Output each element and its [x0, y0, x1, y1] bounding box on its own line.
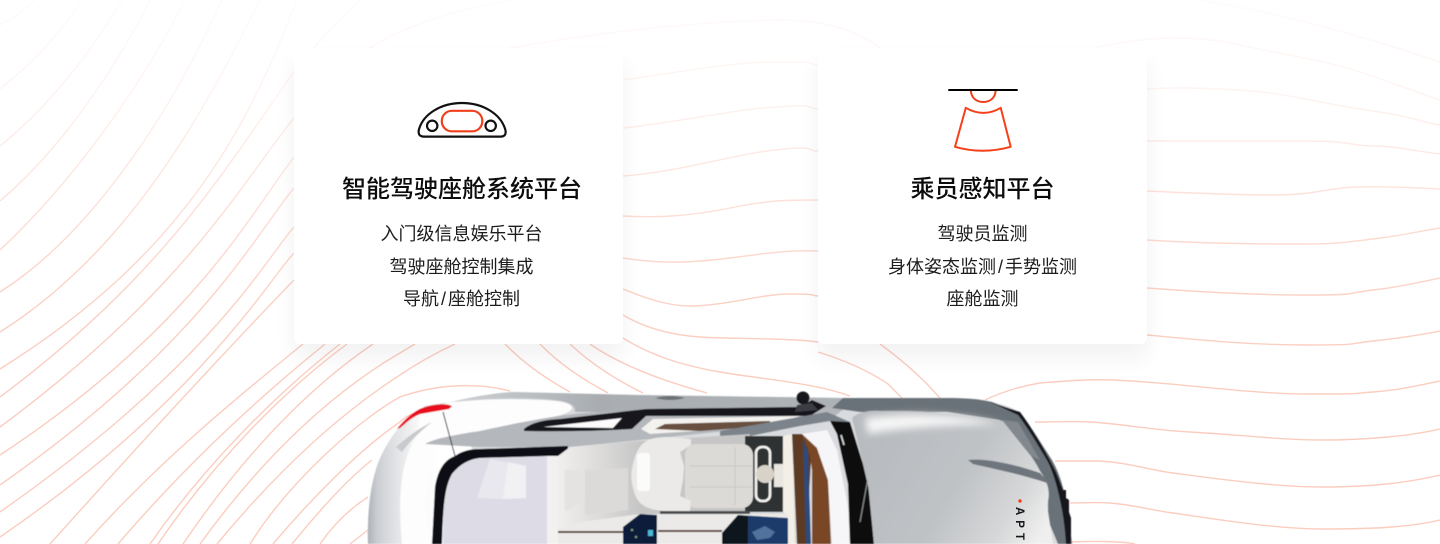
heading: 乘员感知平台: [910, 176, 1054, 203]
pillar detail: [841, 435, 844, 445]
feature list: /: [998, 256, 1003, 276]
feature list: /: [441, 289, 446, 309]
main display: [722, 515, 788, 544]
trunk interior: [443, 456, 547, 544]
icon: occupant camera: [948, 89, 1018, 152]
window slit: [524, 400, 826, 431]
black windshield pillar: [830, 421, 874, 544]
seat back: [631, 437, 691, 511]
feature list: 驾驶员监测: [938, 224, 1028, 244]
steering column: [774, 464, 795, 487]
right roof strut: [720, 412, 850, 442]
dark hood edge: [832, 398, 1072, 544]
front cushion: [685, 444, 753, 508]
wood trim strip: [641, 416, 800, 434]
interior floor panel: [558, 514, 790, 544]
door seam: [443, 412, 455, 456]
feature list: [380, 224, 542, 309]
center console screen: [623, 514, 657, 544]
rear pillar: [547, 456, 560, 544]
rear body panel: [368, 412, 480, 544]
windshield display strip: [803, 440, 811, 544]
roof rail top band: [420, 392, 843, 412]
hood soft highlight: [865, 415, 1000, 434]
feature list: 座舱监测: [946, 289, 1018, 309]
dark cabin floor: [745, 436, 783, 512]
car body silhouette: [368, 392, 1072, 544]
trunk lid shape: [477, 459, 526, 499]
tail light: [397, 404, 452, 429]
rear deck white area: [400, 399, 572, 544]
hood crease: [968, 460, 1050, 484]
cabin gray base: [558, 434, 750, 530]
hood panel: [852, 411, 1053, 544]
feature list: 驾驶座舱控制集成: [390, 256, 534, 276]
feature list: 身体姿态监测 手势监测: [888, 256, 1077, 276]
black grille edge: [990, 402, 1071, 544]
feature list: 导航 座舱控制: [403, 289, 520, 309]
brand dot: [1018, 499, 1022, 503]
rear fin shading: [396, 422, 432, 452]
door wood panel: [802, 435, 831, 544]
lower roof band: [425, 408, 845, 447]
roof sensor: [655, 396, 685, 400]
roof camera: [795, 392, 818, 412]
headrest: [637, 453, 650, 491]
heading: 智能驾驶座舱系统平台: [342, 176, 582, 203]
hood logo: APT: [1013, 507, 1025, 544]
dashboard cream panel: [783, 434, 795, 544]
feature list: [888, 224, 1077, 309]
black rear frame: [432, 446, 568, 544]
steering wheel: [756, 447, 770, 501]
panel: 乘员感知平台: [818, 48, 1147, 344]
feature list: 入门级信息娱乐平台: [380, 224, 542, 244]
rear seat cushions: [565, 470, 585, 512]
icon: cockpit dome: [418, 102, 507, 138]
glass highlight: [543, 418, 622, 428]
panel: 智能驾驶座舱系统平台: [294, 48, 623, 344]
hood accent window: [1002, 420, 1040, 460]
white door band: [802, 430, 850, 544]
dashboard wood: [792, 434, 812, 544]
